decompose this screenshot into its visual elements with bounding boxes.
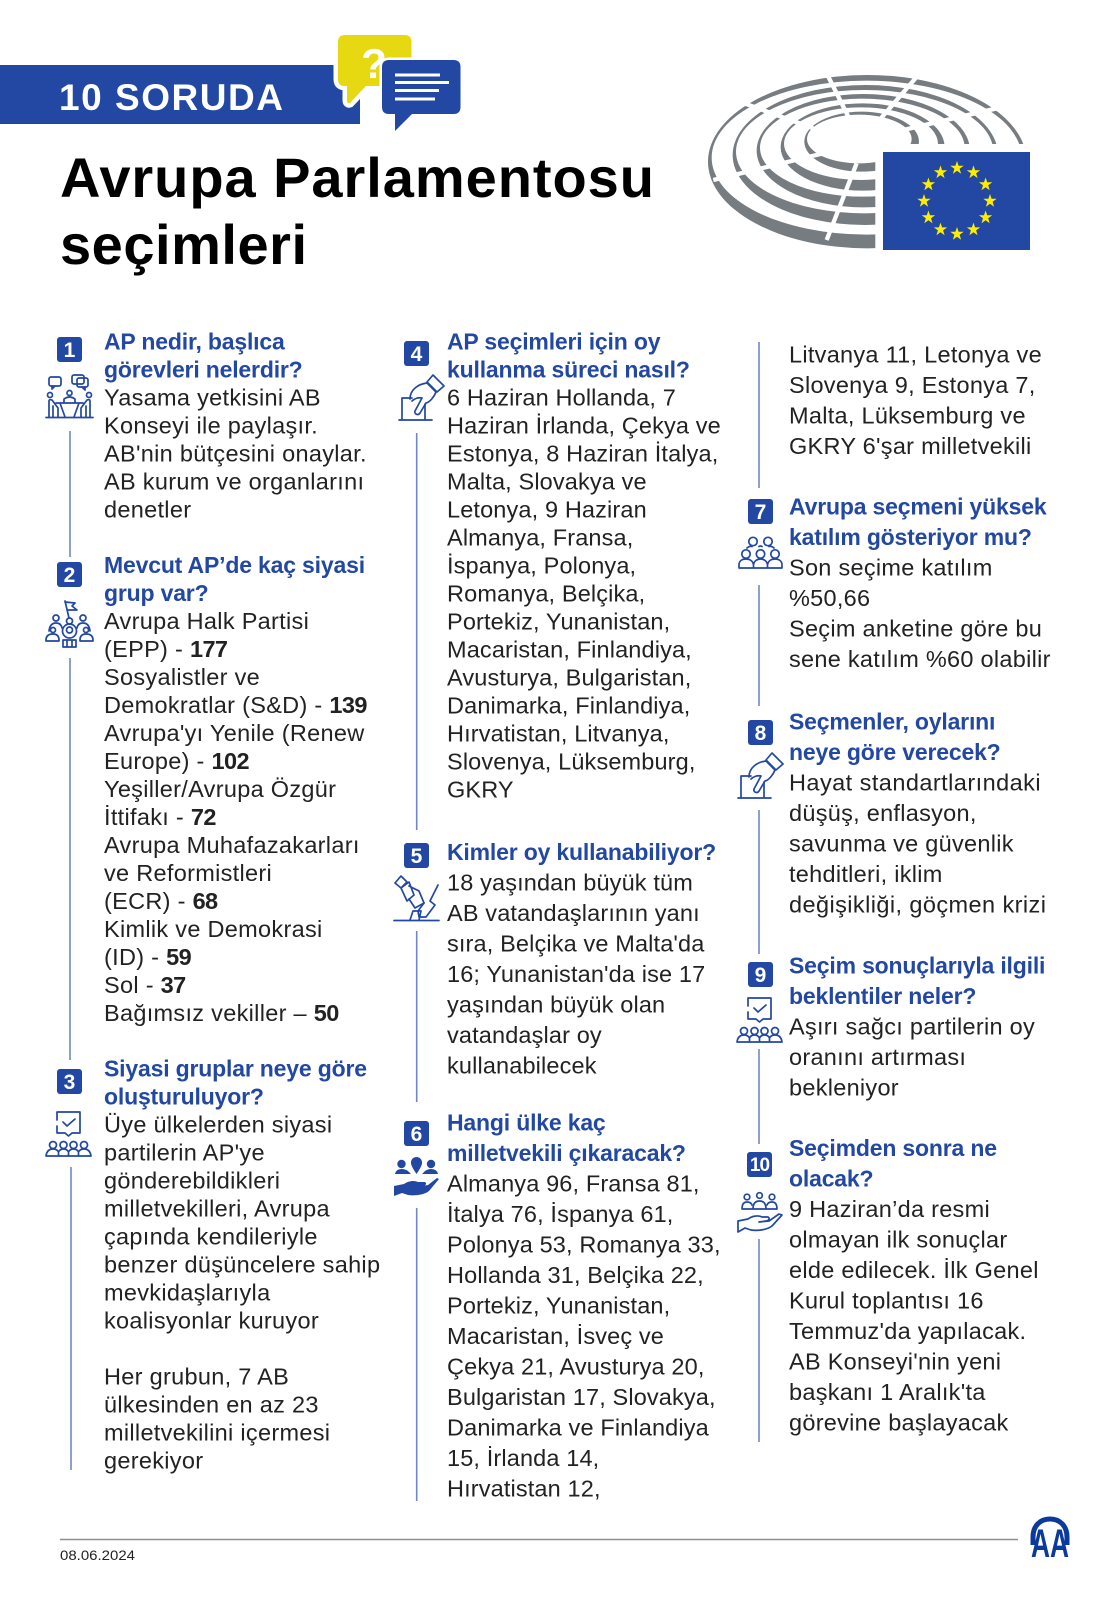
body text: savunma ve güvenlik [789,830,1014,856]
body text: Romanya, Belçika, [447,580,645,606]
body text: Macaristan, İsveç ve [447,1323,664,1349]
heading: Kimler oy kullanabiliyor? [447,839,716,865]
connector line 6 [416,1208,418,1501]
body text: Kimlik ve Demokrasi [104,916,323,942]
icon: speech bubbles [338,35,460,131]
heading: katılım gösteriyor mu? [789,524,1032,550]
heading: Mevcut AP’de kaç siyasi [104,552,365,578]
body text: Hayat standartlarındaki [789,770,1041,796]
body text: Danimarka, Finlandiya, [447,692,690,718]
heading: grup var? [104,580,208,606]
body text: gerekiyor [104,1448,203,1474]
icon: crowd with flag [46,601,93,647]
connector line 6-7 [758,342,760,488]
number badge 3 [57,1069,82,1094]
body text: vatandaşlar oy [447,1022,602,1048]
panel: question 7 [739,494,1051,672]
title [60,146,654,276]
body text: partilerin AP'ye [104,1140,265,1166]
number badge 1: 1 [64,339,76,362]
body text: ülkesinden en az 23 [104,1392,319,1418]
body text: 15, İrlanda 14, [447,1445,599,1471]
body text: Aşırı sağcı partilerin oy [789,1014,1035,1040]
body text: Almanya, Fransa, [447,524,633,550]
panel: question 10 [738,1135,1039,1436]
body text: gönderebildikleri [104,1168,280,1194]
body text: Her grubun, 7 AB [104,1364,289,1390]
body text: Macaristan, Finlandiya, [447,636,692,662]
connector line 3 [70,1167,72,1470]
footer rule [60,1538,1018,1540]
body text: Son seçime katılım [789,554,993,580]
body text: Çekya 21, Avusturya 20, [447,1354,705,1380]
number badge 4 [404,341,429,366]
body text: 9 Haziran’da resmi [789,1196,990,1222]
icon: outlined hand with people [738,1193,782,1232]
heading: oluşturuluyor? [104,1084,264,1110]
body text: Hırvatistan 12, [447,1476,601,1502]
icon: parliament hemicycle [708,70,1035,257]
body text: Europe) - 102 [104,748,249,774]
panel: question 1 [46,328,367,522]
body text: AB vatandaşlarının yanı [447,900,700,926]
number badge 5 [404,843,429,868]
connector line 10 [758,1239,760,1442]
heading: kullanma süreci nasıl? [447,356,690,382]
body text: Avrupa Muhafazakarları [104,832,360,858]
connector line 2-3 [69,658,71,1060]
number badge 6: 6 [411,1123,422,1146]
panel: question 6 [394,1110,721,1502]
body text: 6 Haziran Hollanda, 7 [447,384,676,410]
body text: (EPP) - 177 [104,636,227,662]
connector line 5-6 [416,931,418,1102]
heading: görevleri nelerdir? [104,356,303,382]
body text: (ECR) - 68 [104,888,218,914]
panel: question 8 [738,708,1046,918]
logo: AA: AA [1031,1522,1069,1566]
panel: question 5 [394,839,716,1078]
connector line 7-8 [758,585,760,706]
number badge 9 [748,962,773,987]
body text: başkanı 1 Aralık'ta [789,1379,986,1405]
body text: Kurul toplantısı 16 [789,1288,984,1314]
text: question 6 continued: Litvanya 11, Letonya ve [789,342,1042,368]
body text: milletvekilini içermesi [104,1420,330,1446]
icon: meeting table [46,375,93,418]
body text: Haziran İrlanda, Çekya ve [447,412,721,438]
text: question 6 continued: Malta, Lüksemburg ve [789,402,1026,428]
body text: Avrupa Halk Partisi [104,608,309,634]
body text: denetler [104,496,191,522]
heading: milletvekili çıkaracak? [447,1140,686,1166]
heading: olacak? [789,1166,873,1192]
title: Avrupa Parlamentosu [60,146,654,209]
heading: Seçmenler, oylarını [789,708,995,734]
body text: AB Konseyi'nin yeni [789,1348,1001,1374]
icon: hand holding people [394,1157,439,1196]
body text: Konseyi ile paylaşır. [104,412,318,438]
body text: Danimarka ve Finlandiya [447,1414,710,1440]
body text: 16; Yunanistan'da ise 17 [447,961,705,987]
heading: beklentiler neler? [789,983,976,1009]
body text: Estonya, 8 Haziran İtalya, [447,440,718,466]
header banner: 10 soruda [0,65,360,124]
number badge 1 [57,337,82,362]
body text: Avusturya, Bulgaristan, [447,664,691,690]
body text: çapında kendileriyle [104,1224,318,1250]
heading: neye göre verecek? [789,739,1001,765]
body text: benzer düşüncelere sahip [104,1252,380,1278]
icon: hand casting vote [399,375,444,420]
body text: Slovenya, Lüksemburg, [447,748,696,774]
icon: two hands voting [394,876,439,920]
body text: değişikliği, göçmen krizi [789,892,1046,918]
heading: AP seçimleri için oy [447,328,661,354]
icon: approval bubble with people [46,1112,91,1156]
body text: Malta, Slovakya ve [447,468,647,494]
number badge 7: 7 [755,501,766,524]
body text: Temmuz'da yapılacak. [789,1318,1026,1344]
body text: Yasama yetkisini AB [104,384,321,410]
body text: Avrupa'yı Yenile (Renew [104,720,365,746]
body text: milletvekilleri, Avrupa [104,1196,331,1222]
number badge 5: 5 [411,845,423,868]
body text: tehditleri, iklim [789,861,943,887]
body text: Yeşiller/Avrupa Özgür [104,776,336,802]
heading: AP nedir, başlıca [104,328,285,354]
body text: Üye ülkelerden siyasi [104,1112,332,1138]
panel: question 2 [46,552,367,1026]
body text: kullanabilecek [447,1052,597,1078]
text: question 6 continued: Slovenya 9, Estonya 7, [789,372,1036,398]
body text: Hollanda 31, Belçika 22, [447,1262,704,1288]
panel: question 3 [46,1056,380,1474]
body text: Portekiz, Yunanistan, [447,608,670,634]
number badge 9: 9 [755,964,766,987]
body text: sene katılım %60 olabilir [789,646,1051,672]
number badge 2: 2 [64,564,75,587]
number badge 10 [747,1152,772,1177]
body text: Bağımsız vekiller – 50 [104,1000,339,1026]
body text: bekleniyor [789,1074,899,1100]
text: question 6 continued: GKRY 6'şar milletvekili [789,433,1032,459]
connector line 1-2 [69,431,71,557]
number badge 8 [748,720,773,745]
number badge 3: 3 [64,1071,75,1094]
panel: question 9 [737,952,1045,1100]
heading: Seçim sonuçlarıyla ilgili [789,952,1045,978]
body text: İtalya 76, İspanya 61, [447,1201,673,1227]
body text: koalisyonlar kuruyor [104,1308,319,1334]
body text: mevkidaşlarıyla [104,1280,271,1306]
panel: question 4 [399,328,721,802]
heading: Avrupa seçmeni yüksek [789,494,1047,520]
body text: Polonya 53, Romanya 33, [447,1232,721,1258]
heading: Hangi ülke kaç [447,1110,606,1136]
number badge 6 [404,1121,429,1146]
number badge 7 [748,499,773,524]
icon: group of people [739,537,782,568]
body text: oranını artırması [789,1044,966,1070]
body text: elde edilecek. İlk Genel [789,1257,1039,1283]
icon: hand casting vote [738,753,783,798]
body text: AB'nin bütçesini onaylar. [104,440,367,466]
footer date: 08.06.2024 [60,1547,135,1563]
body text: İttifakı - 72 [104,804,216,830]
body text: görevine başlayacak [789,1410,1009,1436]
body text: sıra, Belçika ve Malta'da [447,930,705,956]
body text: Portekiz, Yunanistan, [447,1292,670,1318]
number badge 8: 8 [755,722,767,745]
number badge 4: 4 [411,343,423,366]
body text: Demokratlar (S&D) - 139 [104,692,367,718]
connector line 8-9 [758,810,760,954]
body text: %50,66 [789,585,870,611]
body text: GKRY [447,776,514,802]
heading: Seçimden sonra ne [789,1135,997,1161]
body text: yaşından büyük olan [447,992,665,1018]
body text: AB kurum ve organlarını [104,468,364,494]
body text: Hırvatistan, Litvanya, [447,720,670,746]
body text: İspanya, Polonya, [447,552,636,578]
header banner: 10 soruda: 10 SORUDA [59,77,283,118]
connector line 9-10 [758,1049,760,1144]
logo: AA [1031,1519,1069,1566]
body text: ve Reformistleri [104,860,272,886]
body text: 18 yaşından büyük tüm [447,870,693,896]
icon: EU flag [883,152,1030,250]
body text: düşüş, enflasyon, [789,800,977,826]
body text: Bulgaristan 17, Slovakya, [447,1384,716,1410]
body text: Seçim anketine göre bu [789,616,1042,642]
number badge 2 [57,562,82,587]
icon: approval bubble with people [737,998,782,1042]
body text: Almanya 96, Fransa 81, [447,1170,700,1196]
connector line 4-5 [416,433,418,830]
body text: (ID) - 59 [104,944,191,970]
body text: Sosyalistler ve [104,664,260,690]
heading: Siyasi gruplar neye göre [104,1056,367,1082]
body text: Sol - 37 [104,972,186,998]
title: seçimleri [60,213,307,276]
icon: speech bubbles: ? [361,40,387,87]
body text: Letonya, 9 Haziran [447,496,647,522]
body text: olmayan ilk sonuçlar [789,1226,1008,1252]
number badge 10: 10 [750,1155,769,1176]
